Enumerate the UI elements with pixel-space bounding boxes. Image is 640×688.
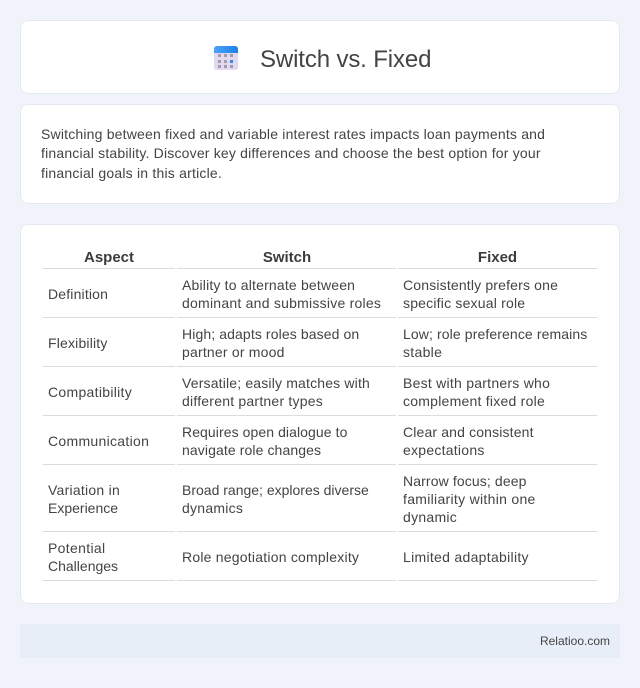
footer text: Relatioo.com xyxy=(540,634,610,648)
row: Variation in Experience xyxy=(48,473,536,525)
row: Variation in Experience: familiarity within one xyxy=(403,491,536,507)
row: Flexibility: partner or mood xyxy=(182,344,285,360)
intro text: financial goals in this article. xyxy=(41,165,222,181)
row: Variation in Experience: dynamics xyxy=(182,500,243,516)
row: Flexibility: stable xyxy=(403,344,442,360)
row: Variation in Experience: Variation in xyxy=(48,482,120,498)
row: Definition xyxy=(48,277,558,311)
row: Definition: Ability to alternate between xyxy=(182,277,355,293)
title: Switch vs. Fixed xyxy=(260,46,431,73)
row: Compatibility: complement fixed role xyxy=(403,393,545,409)
table heading row: Switch xyxy=(263,249,311,266)
footer bar xyxy=(20,624,620,658)
row: Communication: expectations xyxy=(403,442,485,458)
row: Potential Challenges: Potential xyxy=(48,540,105,556)
row: Definition: dominant and submissive roles xyxy=(182,295,381,311)
intro text xyxy=(41,126,545,181)
row: Flexibility: High; adapts roles based on xyxy=(182,326,359,342)
row: Flexibility: Low; role preference remains xyxy=(403,326,587,342)
row: Variation in Experience: dynamic xyxy=(403,509,457,525)
row: Compatibility: Versatile; easily matches with xyxy=(182,375,370,391)
row: Compatibility xyxy=(48,375,550,409)
row: Compatibility: Best with partners who xyxy=(403,375,550,391)
row: Communication: Communication xyxy=(48,433,149,449)
table heading row xyxy=(84,249,517,266)
row: Variation in Experience: Broad range; explores diverse xyxy=(182,482,369,498)
header card xyxy=(20,20,620,94)
intro card xyxy=(20,104,620,204)
row: Flexibility xyxy=(48,326,587,360)
row: Definition: Definition xyxy=(48,286,108,302)
row: Potential Challenges xyxy=(48,540,529,574)
row: Variation in Experience: Experience xyxy=(48,500,118,516)
row: Definition: Consistently prefers one xyxy=(403,277,558,293)
row: Communication xyxy=(48,424,534,458)
table heading row: Fixed xyxy=(478,249,517,266)
row: Definition: specific sexual role xyxy=(403,295,525,311)
row: Compatibility: different partner types xyxy=(182,393,323,409)
row: Flexibility: Flexibility xyxy=(48,335,108,351)
intro text: Switching between fixed and variable interest rates impacts loan payments and xyxy=(41,126,545,142)
row: Variation in Experience: Narrow focus; deep xyxy=(403,473,527,489)
comparison table card xyxy=(20,224,620,604)
intro text: financial stability. Discover key differences and choose the best option for your xyxy=(41,145,541,161)
table heading row: Aspect xyxy=(84,249,134,266)
row: Communication: Requires open dialogue to xyxy=(182,424,347,440)
row: Compatibility: Compatibility xyxy=(48,384,132,400)
row: Potential Challenges: Role negotiation complexity xyxy=(182,549,359,565)
row: Potential Challenges: Challenges xyxy=(48,558,118,574)
row: Communication: Clear and consistent xyxy=(403,424,534,440)
icon: calendar xyxy=(214,46,238,70)
row: Communication: navigate role changes xyxy=(182,442,321,458)
row: Potential Challenges: Limited adaptability xyxy=(403,549,529,565)
